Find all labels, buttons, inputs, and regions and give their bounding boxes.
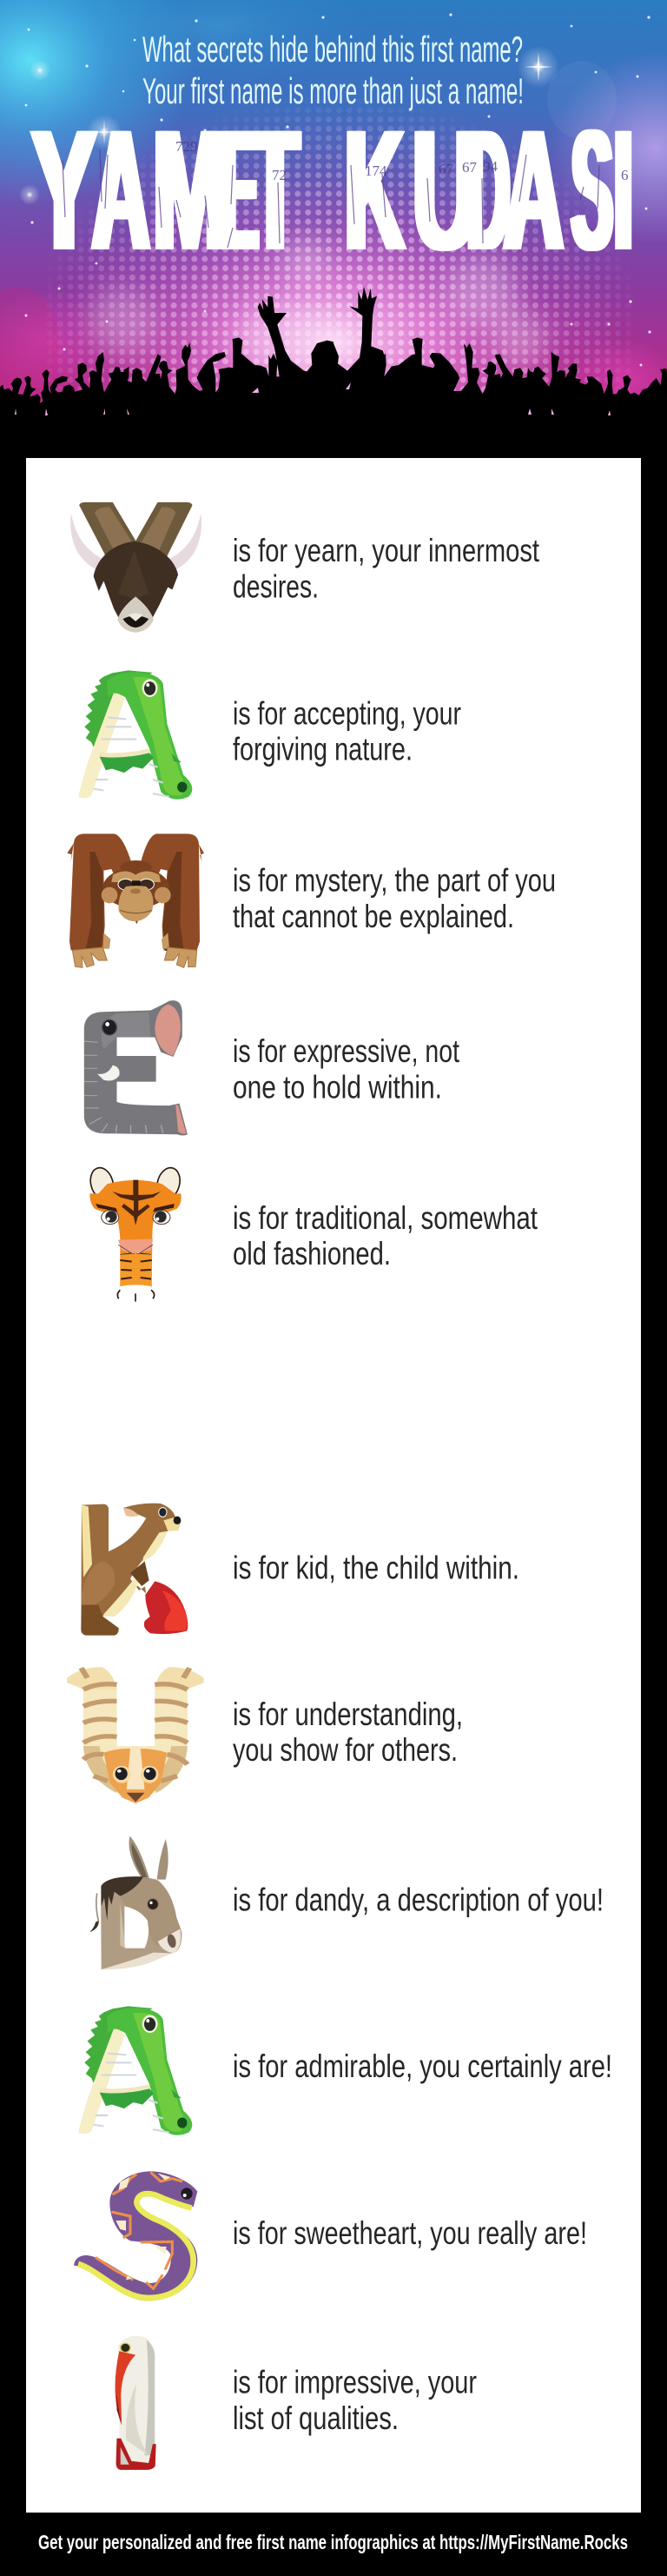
letter row: A [78, 670, 461, 800]
title: YAMET KUDASI: 94 [483, 158, 499, 175]
icon: crocodile letter A [78, 2006, 192, 2135]
icon: elephant letter E [84, 1000, 188, 1136]
sparkles [19, 13, 651, 367]
text: mystery: is for mystery, the part of you [233, 862, 556, 899]
letter row: S [74, 2171, 587, 2300]
text: traditional [233, 1199, 538, 1271]
letter row: E [84, 1000, 459, 1136]
letter row: T [87, 1165, 538, 1302]
icon: snake letter S [74, 2171, 197, 2300]
title: YAMET KUDASI: T [251, 94, 300, 286]
text: mystery [233, 862, 556, 934]
header background: stage lights [0, 0, 667, 403]
heading: tagline [142, 29, 524, 111]
letter row: D [89, 1836, 604, 1969]
letter row: K [81, 1504, 519, 1636]
title: YAMET KUDASI: A [92, 94, 149, 286]
letter row: I [116, 2336, 477, 2470]
panel: white content [26, 458, 641, 2513]
letter row: Y [70, 502, 539, 633]
title: YAMET KUDASI: A [504, 94, 564, 286]
text: accepting: forgiving nature. [233, 730, 413, 767]
text: traditional: old fashioned. [233, 1235, 391, 1271]
title: YAMET KUDASI: 6 [621, 167, 629, 183]
icon: tiger letter T [87, 1165, 183, 1302]
text: understanding [233, 1696, 463, 1768]
icon: orangutan letter M [67, 833, 204, 967]
text: impressive: is for impressive, your [233, 2364, 477, 2400]
text: impressive: list of qualities. [233, 2400, 399, 2436]
crowd silhouette [0, 287, 667, 459]
title: YAMET KUDASI: 729 [175, 138, 198, 155]
title: YAMET KUDASI: D [467, 94, 510, 286]
icon: yak letter Y [70, 502, 201, 633]
letter row: U [67, 1667, 463, 1803]
text: accepting: is for accepting, your [233, 695, 461, 732]
title: YAMET KUDASI: U [413, 94, 479, 286]
text: expressive [233, 1032, 459, 1105]
text: mystery: that cannot be explained. [233, 898, 514, 934]
text: impressive [233, 2364, 477, 2436]
title: YAMET KUDASI: M [153, 94, 228, 286]
text: kid: is for kid, the child within. [233, 1549, 519, 1585]
text: accepting [233, 695, 461, 767]
title: YAMET KUDASI: I [614, 94, 632, 286]
title: YAMET KUDASI: 67 [462, 159, 478, 176]
title: YAMET KUDASI: K [345, 94, 405, 286]
icon: stork letter I [116, 2336, 156, 2470]
title: YAMET KUDASI: 72 [272, 167, 287, 183]
title: YAMET KUDASI [30, 94, 632, 286]
text: understanding: you show for others. [233, 1731, 458, 1768]
text: yearn: is for yearn, your innermost [233, 532, 539, 568]
text: expressive: one to hold within. [233, 1069, 442, 1105]
title: YAMET KUDASI: 174 [365, 163, 387, 179]
title: YAMET KUDASI: S [571, 94, 613, 286]
text: yearn [233, 532, 539, 605]
icon: donkey letter D [89, 1836, 182, 1969]
title: YAMET KUDASI: 67 [439, 161, 453, 177]
icon: ram letter U [67, 1667, 204, 1803]
text: yearn: desires. [233, 568, 319, 605]
text: understanding: is for understanding, [233, 1696, 463, 1732]
letter row: A (second) [78, 2006, 612, 2135]
text: traditional: is for traditional, somewhat [233, 1199, 538, 1236]
title: YAMET KUDASI: Y [31, 94, 96, 286]
title: YAMET KUDASI: E [221, 94, 259, 286]
icon: kangaroo letter K [81, 1504, 188, 1636]
letter row: M [67, 833, 556, 967]
text: expressive: is for expressive, not [233, 1032, 459, 1069]
icon: crocodile letter A [78, 670, 192, 800]
